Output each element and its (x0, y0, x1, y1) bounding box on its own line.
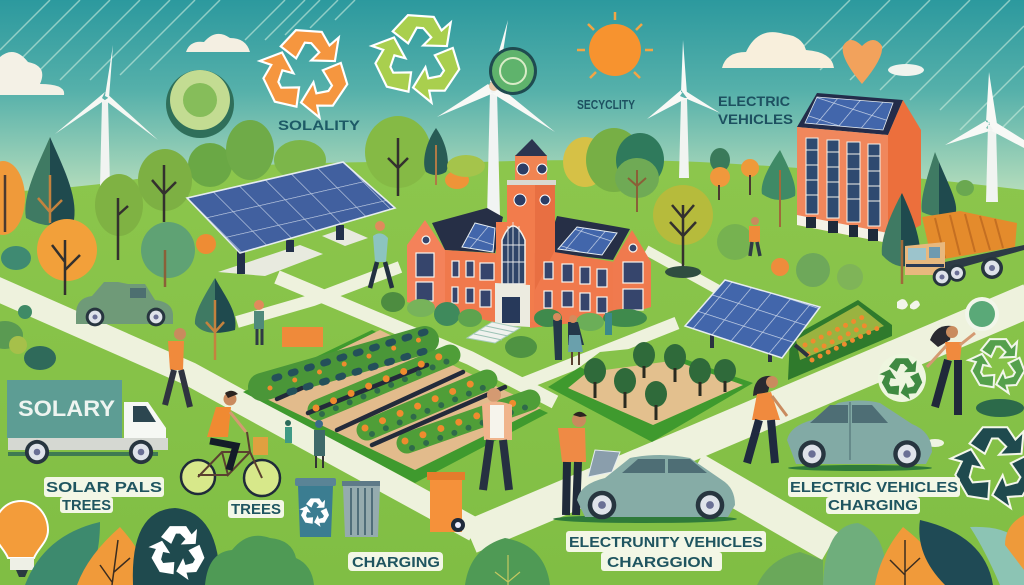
truck label: SOLARY (18, 396, 115, 421)
icon: green recycling circle (878, 354, 926, 402)
icon: green recycling (364, 13, 470, 107)
icon: green recycling triangle (966, 339, 1024, 394)
cloud: upper left small (186, 34, 250, 52)
clocks (517, 163, 529, 175)
bottom left bulb (0, 501, 48, 577)
label: solar pals trees (44, 477, 164, 514)
recycling clutter left (0, 305, 56, 370)
arched window (502, 226, 525, 284)
label: trees: TREES (231, 501, 281, 518)
small people on path (285, 420, 325, 468)
icon: P badge (489, 47, 537, 95)
school building (407, 139, 651, 343)
trees: left grove (0, 120, 326, 360)
wind turbine: right (647, 40, 720, 178)
icon: dark recycling (947, 427, 1024, 510)
trees: right cluster (563, 128, 974, 290)
person near solar array (370, 221, 392, 288)
text: secyclity: SECYCLITY (577, 98, 636, 112)
person at car (558, 412, 620, 515)
trees: centre back (365, 116, 485, 196)
icon: sun (577, 12, 653, 78)
label: electrunity vehicles: CHARGGION (607, 554, 713, 571)
bottom centre bush (465, 538, 550, 585)
orange bin (427, 472, 465, 532)
dump truck (905, 211, 1024, 286)
central car (553, 455, 737, 523)
label: electric vehicles charging (788, 477, 960, 514)
electric building right (797, 93, 921, 243)
text: electric vehicles top: ELECTRIC (718, 94, 790, 109)
label: electric vehicles charging: CHARGING (828, 497, 918, 514)
bushes by school (381, 292, 647, 358)
tower (507, 183, 555, 253)
orchard (548, 342, 753, 442)
ground (0, 160, 1024, 585)
label: electrunity vehicles (566, 531, 766, 571)
bottom left orange leaf (77, 527, 147, 585)
person with basket (254, 300, 323, 347)
raised flower bed (788, 300, 892, 380)
icon: heart (843, 40, 882, 84)
icon: orange recycling (252, 28, 358, 122)
label: solar pals trees: TREES (62, 497, 111, 514)
label: charging: CHARGING (352, 554, 440, 571)
roofs (432, 208, 503, 253)
woman by right car (747, 376, 787, 463)
wind turbine: far right (945, 72, 1024, 202)
right car (787, 400, 932, 471)
person beside garden (482, 388, 512, 490)
wind turbine: centre (437, 20, 555, 217)
icon: green badge (166, 70, 234, 138)
person upper right with orange top (749, 217, 760, 256)
wings (445, 250, 505, 325)
dark recycling bubble (133, 508, 220, 585)
leaf bush right (976, 399, 1024, 417)
green car upper left (76, 282, 173, 326)
recycling bin blue (295, 478, 336, 537)
woman with badge (927, 326, 975, 415)
truck solary (7, 380, 168, 464)
bottom bush (205, 536, 314, 585)
paths network (0, 250, 1024, 546)
bottom left teal leaf (25, 522, 100, 585)
vegetable garden (243, 330, 548, 483)
conifer by truck (882, 193, 920, 284)
sky hatch rays (0, 0, 1024, 140)
icon: badge green circle top right (965, 297, 999, 331)
bottom right leaves (757, 515, 1024, 585)
cyclist (181, 391, 280, 496)
label: solar pals trees: SOLAR PALS (46, 479, 162, 496)
solar array: right (685, 280, 820, 362)
sky background (0, 0, 1024, 200)
walking person (165, 328, 190, 407)
steps (467, 322, 520, 343)
text: solality: SOLALITY (278, 118, 360, 133)
roof solar panels (462, 223, 495, 252)
white plant clutter (897, 299, 944, 447)
cloud: top left (0, 52, 64, 95)
cloud: upper right (722, 32, 834, 68)
cloud: small right (888, 64, 924, 76)
windows (416, 236, 643, 313)
solar array: left (187, 162, 395, 276)
text: electric vehicles top (718, 94, 793, 127)
text: electric vehicles top: VEHICLES (718, 112, 793, 127)
grey bin (342, 481, 380, 537)
people by school (553, 313, 612, 365)
wind turbine: left (55, 45, 158, 187)
entrance (495, 283, 530, 327)
label: electrunity vehicles: ELECTRUNITY VEHICLES (569, 534, 763, 551)
label: electric vehicles charging: ELECTRIC VEHICLES (790, 479, 958, 496)
